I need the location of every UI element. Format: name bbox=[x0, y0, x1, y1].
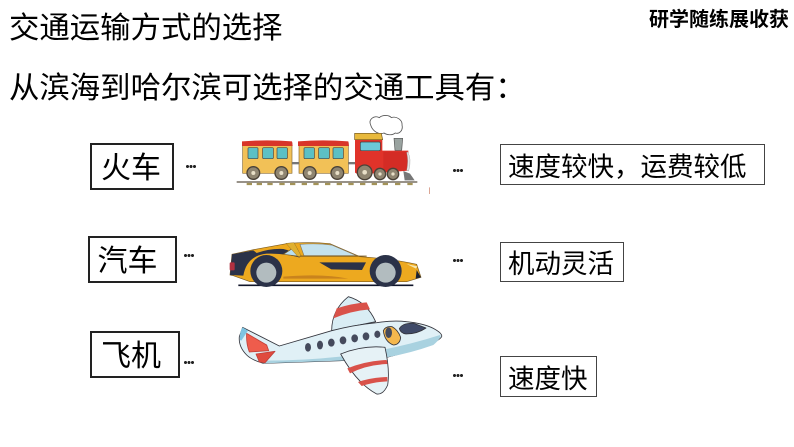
leader dots: plane left bbox=[184, 361, 194, 364]
label: car bbox=[88, 236, 177, 283]
answer: car: 机动灵活 bbox=[508, 249, 614, 279]
label: plane: 飞机 bbox=[101, 340, 161, 372]
title: 交通运输方式的选择 bbox=[9, 11, 283, 45]
label: plane bbox=[90, 331, 180, 378]
answer: car bbox=[500, 242, 624, 282]
leader dots: train left bbox=[186, 165, 196, 168]
answer: plane: 速度快 bbox=[508, 364, 588, 394]
leader dots: car left bbox=[184, 254, 194, 257]
icon: train bbox=[236, 115, 430, 194]
leader dots: car right bbox=[453, 259, 463, 262]
label: train bbox=[90, 143, 174, 190]
answer: plane bbox=[500, 356, 597, 397]
subtitle: 从滨海到哈尔滨可选择的交通工具有： bbox=[9, 71, 526, 105]
leader dots: train right bbox=[453, 169, 463, 172]
icon: plane bbox=[238, 296, 442, 394]
label: train: 火车 bbox=[101, 152, 161, 184]
leader dots: plane right bbox=[453, 374, 463, 377]
corner label: 研学随练展收获 bbox=[649, 9, 789, 31]
icon: car bbox=[230, 242, 422, 287]
label: car: 汽车 bbox=[98, 244, 158, 278]
answer: train bbox=[500, 144, 765, 185]
answer: train: 速度较快，运费较低 bbox=[508, 152, 746, 182]
